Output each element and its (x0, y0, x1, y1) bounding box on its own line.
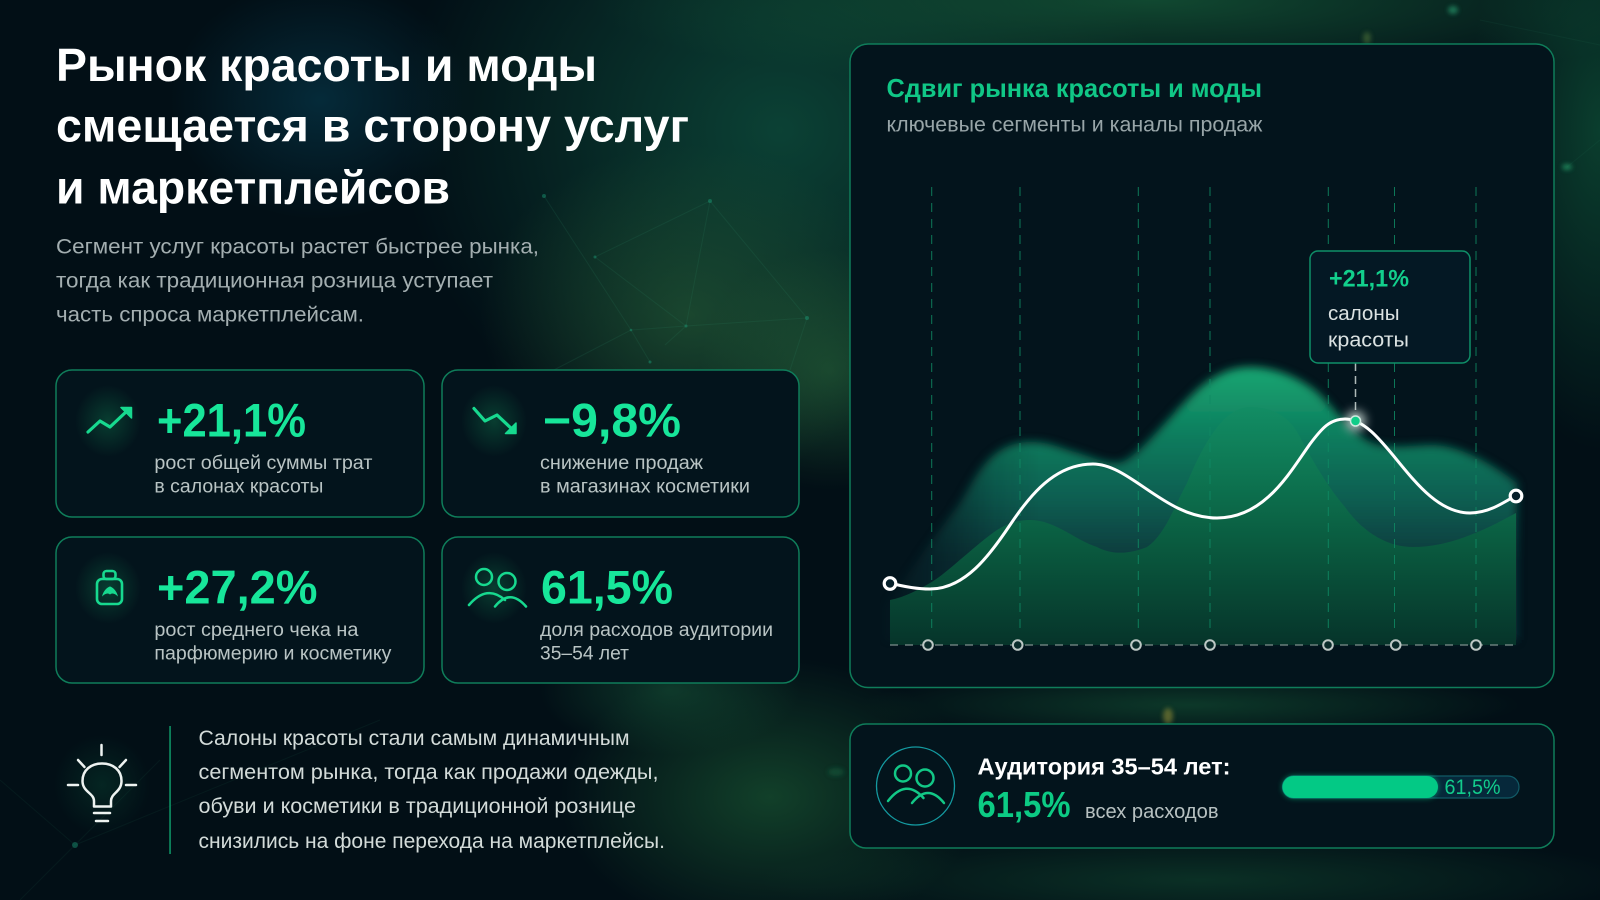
progress bar: 61,5% (1444, 776, 1500, 799)
icon: trending up (88, 408, 132, 432)
title (56, 39, 689, 214)
panel: stat audience share (442, 537, 799, 683)
audience value: 61,5% (978, 784, 1070, 825)
audience heading: Аудитория 35–54 лет: (978, 754, 1230, 780)
subtitle: часть спроса маркетплейсам. (56, 304, 364, 326)
panel: stat salons (56, 370, 424, 517)
text block: takeaway: снизились на фоне перехода на маркетплейсы. (198, 830, 665, 853)
panel: stat average check: +27,2% (157, 560, 318, 614)
text block: takeaway (198, 727, 665, 853)
icon: bottle (97, 571, 122, 604)
text block: takeaway: сегментом рынка, тогда как продажи одежды, (198, 761, 658, 784)
chart: highlighted point (1346, 411, 1366, 431)
icon: people (469, 569, 526, 606)
chart: back area (885, 367, 1517, 640)
chart: grid lines (932, 187, 1476, 634)
callout: салоны (1328, 303, 1400, 325)
panel: stat cosmetics stores: −9,8% (543, 394, 681, 446)
chart: baseline (890, 644, 1516, 646)
text block: takeaway: обуви и косметики в традиционной рознице (198, 795, 636, 818)
subtitle (56, 236, 539, 326)
title: Рынок красоты и моды (56, 39, 597, 91)
text block: takeaway: Салоны красоты стали самым динамичным (198, 727, 630, 750)
chart: axis markers (923, 640, 1481, 650)
divider line (169, 726, 171, 854)
chart: line start point (884, 578, 896, 589)
subtitle: Сегмент услуг красоты растет быстрее рынка, (56, 236, 539, 258)
panel: stat audience share: 35–54 лет (540, 644, 629, 664)
icon: people in circle (876, 747, 954, 825)
subtitle: тогда как традиционная розница уступает (56, 270, 493, 292)
chart subheading: ключевые сегменты и каналы продаж (886, 114, 1262, 136)
callout (1310, 251, 1470, 363)
title: смещается в сторону услуг (56, 100, 689, 152)
panel: stat salons: рост общей суммы трат (154, 453, 373, 474)
chart: white trend line (890, 419, 1515, 589)
chart: line end point (1510, 490, 1522, 502)
chart: front area (890, 407, 1516, 645)
panel: stat average check (56, 537, 424, 683)
panel: stat salons: +21,1% (157, 394, 306, 446)
callout connector (1354, 363, 1356, 412)
panel: audience (850, 724, 1554, 848)
audience caption: всех расходов (1085, 801, 1218, 823)
title: и маркетплейсов (56, 162, 450, 214)
panel: stat cosmetics stores: в магазинах косметики (540, 476, 750, 498)
callout: красоты (1328, 330, 1409, 352)
panel: stat salons: в салонах красоты (154, 476, 323, 498)
callout: +21,1% (1329, 266, 1409, 292)
panel: chart (850, 44, 1554, 688)
panel: stat average check: парфюмерию и косметику (154, 644, 392, 664)
panel: stat audience share: доля расходов аудитории (540, 620, 773, 641)
panel: stat cosmetics stores: снижение продаж (540, 453, 703, 474)
progress bar (1282, 776, 1519, 799)
icon: light bulb (54, 735, 150, 835)
icon: trending down (474, 408, 516, 434)
panel: stat audience share: 61,5% (541, 560, 673, 614)
panel: stat average check: рост среднего чека на (154, 620, 359, 641)
panel: stat cosmetics stores (442, 370, 799, 517)
chart heading: Сдвиг рынка красоты и моды (886, 73, 1262, 103)
